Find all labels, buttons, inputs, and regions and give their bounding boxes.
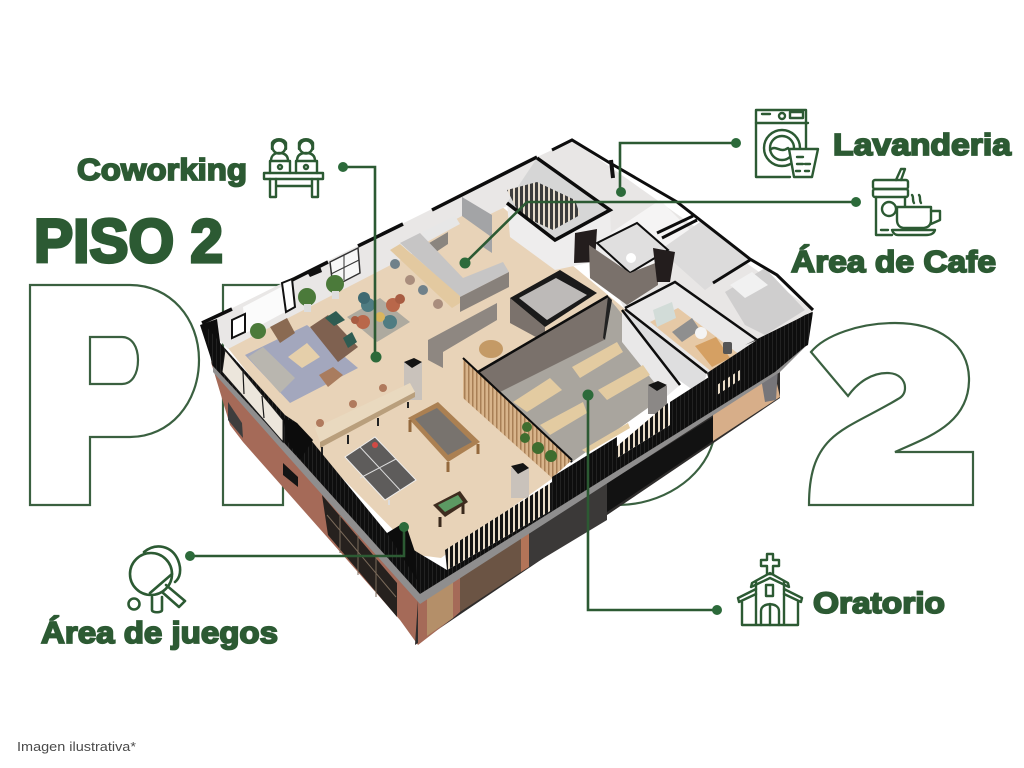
icon: coffee cups xyxy=(873,169,940,235)
3D floor plan of the building xyxy=(200,140,813,645)
rooms, upper right xyxy=(537,140,813,378)
column by wood wall xyxy=(511,463,529,498)
label: Oratorio: Oratorio xyxy=(813,587,945,620)
outlined background lettering: PISO 2 xyxy=(30,285,973,505)
icon: table tennis paddles xyxy=(128,546,185,612)
label: Lavanderia: Lavanderia xyxy=(833,127,1012,162)
label: Área de juegos: Área de juegos xyxy=(41,615,278,650)
right facade, ground floor xyxy=(415,368,780,645)
icon: church xyxy=(738,554,802,625)
floor: wood xyxy=(228,205,650,558)
concrete slab edge xyxy=(213,344,808,604)
heading: PISO 2: PISO 2 xyxy=(34,207,223,275)
staircase block xyxy=(507,158,612,270)
lounge area xyxy=(245,311,358,403)
low partition wall xyxy=(428,303,497,368)
railings xyxy=(445,370,740,570)
label: Área de Cafe: Área de Cafe xyxy=(791,244,996,279)
callout line: Oratorio xyxy=(582,390,722,615)
side table xyxy=(479,340,503,358)
back wall with windows xyxy=(200,157,540,365)
oratorio benches xyxy=(513,342,650,453)
elevator xyxy=(510,270,597,342)
office room xyxy=(622,282,757,395)
icon: coworking desk xyxy=(264,139,323,197)
callout line: Área de Cafe xyxy=(460,197,861,268)
callout line: Área de juegos xyxy=(185,522,409,561)
bathroom box xyxy=(589,223,675,305)
billiard table xyxy=(408,402,480,472)
left brick facade xyxy=(211,362,420,645)
cowork tables xyxy=(347,292,410,342)
ping-pong table xyxy=(345,437,416,505)
right parapet over rooms xyxy=(707,312,812,402)
slatted wood wall xyxy=(463,358,572,478)
column xyxy=(404,358,422,400)
long coworking table xyxy=(315,383,415,456)
kitchen island and bar xyxy=(390,197,509,312)
oratorio room xyxy=(478,296,680,462)
callout line: Coworking xyxy=(338,162,382,362)
icon: washing machine with basket xyxy=(756,110,818,177)
footnote: Imagen ilustrativa* xyxy=(17,739,136,754)
black parapets xyxy=(205,325,808,594)
label: Coworking: Coworking xyxy=(77,152,247,187)
plants xyxy=(250,275,344,339)
foosball table xyxy=(433,491,468,527)
callout line: Lavanderia xyxy=(616,138,741,197)
